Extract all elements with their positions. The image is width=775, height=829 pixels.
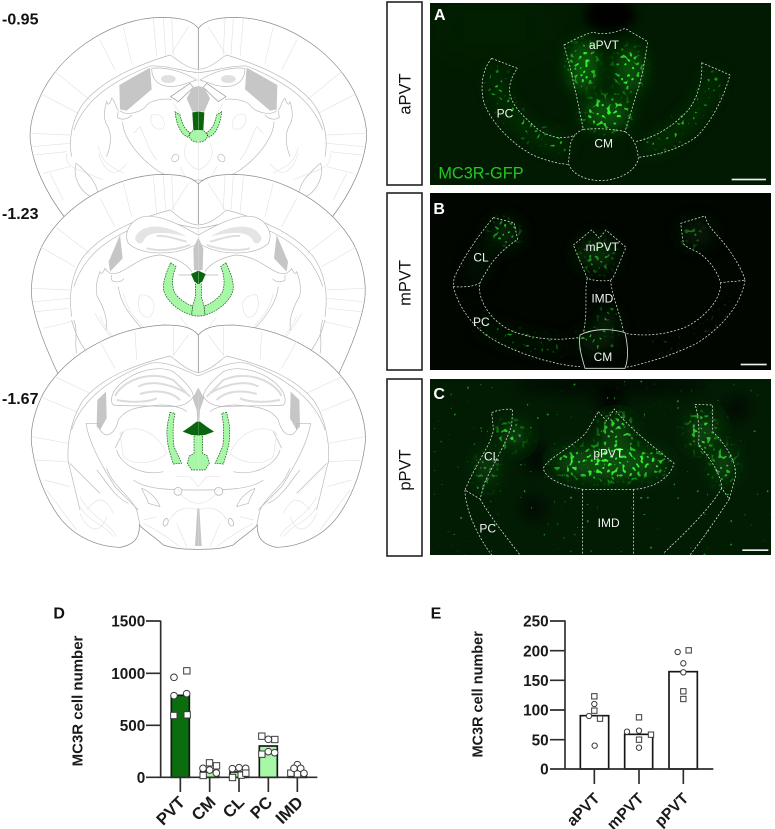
panel A: micrograph aPVT	[430, 0, 771, 185]
panel A: micrograph aPVT: PC	[497, 106, 514, 120]
stain label: MC3R-GFP	[438, 165, 524, 183]
bregma label -1.23: -1.23	[2, 206, 39, 223]
panel B: micrograph mPVT: CM	[594, 350, 612, 364]
panel B: micrograph mPVT: PC	[473, 315, 490, 329]
panel: row label pPVT	[387, 379, 422, 556]
panel B: micrograph mPVT: B	[433, 201, 445, 218]
panel: brain atlas sections	[30, 17, 367, 549]
y tick labels: 250	[523, 614, 549, 631]
panel C: micrograph pPVT: CL	[484, 449, 500, 463]
x tick labels	[564, 790, 692, 829]
x tick labels	[152, 793, 307, 829]
panel: row label mPVT	[387, 193, 422, 370]
x tick labels: PC	[246, 793, 276, 823]
panel C: micrograph pPVT: IMD	[598, 516, 620, 530]
scale bar	[741, 364, 767, 365]
panel: row label aPVT	[387, 2, 422, 185]
CL and PC left outline	[465, 409, 520, 555]
PC right outline	[635, 63, 730, 157]
mPVT outline	[573, 230, 626, 281]
panel B: micrograph mPVT: IMD	[591, 291, 614, 305]
panel B: micrograph mPVT	[430, 193, 771, 370]
axes	[146, 621, 317, 792]
CL and PC right outline	[625, 216, 745, 367]
y tick labels: 500	[120, 718, 145, 735]
panel B: micrograph mPVT: mPVT	[586, 240, 620, 254]
y tick labels: 1000	[111, 666, 145, 683]
panel C: micrograph pPVT	[430, 379, 771, 555]
y tick labels: 0	[137, 770, 145, 787]
panel letter D: D	[53, 606, 65, 623]
panel C: micrograph pPVT: pPVT	[593, 447, 624, 461]
x tick labels: IMD	[272, 793, 307, 828]
panel E: bar chart by PVT subdivision	[431, 606, 713, 829]
IMD outline	[583, 278, 623, 333]
y tick labels: 200	[523, 643, 549, 660]
panel A: micrograph aPVT: aPVT	[589, 38, 620, 52]
panel A: micrograph aPVT: A	[434, 7, 446, 24]
panel: row label pPVT: pPVT	[396, 449, 414, 491]
panel C: micrograph pPVT: C	[433, 386, 445, 403]
panel: row label aPVT: aPVT	[396, 73, 414, 115]
panel D: bar chart by region	[53, 606, 317, 829]
y tick labels: 0	[540, 762, 549, 779]
scale bar	[732, 179, 766, 180]
x tick labels: CL	[219, 793, 248, 822]
panel A: micrograph aPVT: CM	[594, 137, 613, 151]
bregma label -0.95: -0.95	[2, 12, 39, 28]
y tick labels: 50	[532, 732, 549, 749]
y tick labels: 150	[523, 673, 549, 690]
bregma label -1.67: -1.67	[2, 391, 39, 408]
data points	[171, 668, 307, 781]
y axis title: MC3R cell number	[69, 635, 86, 766]
x tick labels: CM	[188, 793, 219, 824]
y tick labels: 1500	[111, 613, 145, 630]
data points	[586, 648, 691, 750]
axes	[550, 620, 713, 784]
IMD outline	[583, 489, 634, 555]
panel letter E: E	[431, 606, 442, 623]
CM outline	[580, 330, 627, 368]
y tick labels	[111, 613, 145, 787]
x tick labels: aPVT	[564, 790, 604, 829]
atlas section at -1.67	[31, 325, 365, 549]
y axis title: MC3R cell number	[471, 631, 487, 758]
CL and PC left outline	[453, 218, 580, 367]
bars	[580, 672, 697, 769]
CL and PC right outline	[663, 404, 736, 555]
x tick labels: PVT	[152, 793, 189, 829]
pPVT outline	[543, 409, 674, 489]
panel: row label mPVT: mPVT	[396, 260, 414, 306]
y tick labels: 100	[523, 703, 549, 720]
PC left outline	[482, 58, 575, 164]
bars	[171, 695, 306, 777]
y tick labels	[523, 614, 549, 779]
CM outline	[568, 129, 638, 181]
panel B: micrograph mPVT: CL	[473, 250, 489, 264]
scale bar	[742, 549, 768, 551]
panel C: micrograph pPVT: PC	[479, 521, 496, 535]
atlas section at -1.23	[31, 174, 365, 377]
atlas section at -0.95	[30, 17, 367, 220]
aPVT outline	[564, 28, 648, 132]
